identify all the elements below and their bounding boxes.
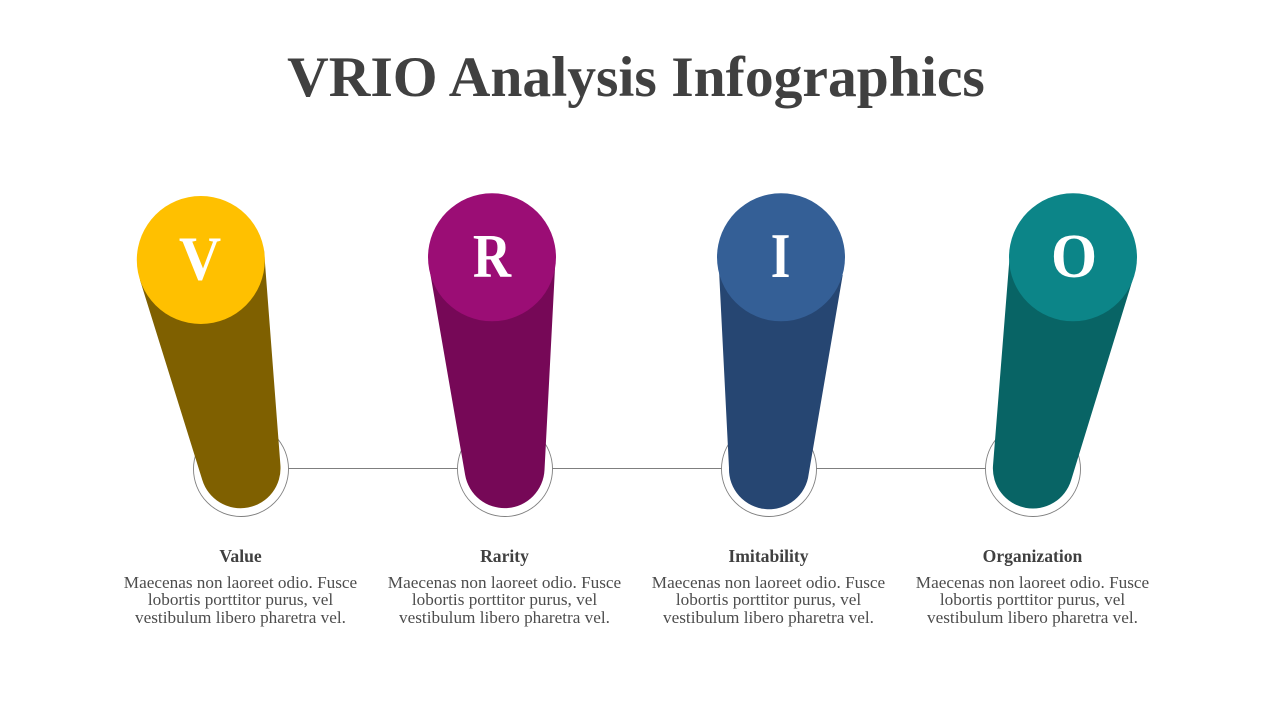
text block: Imitability: Imitability: [728, 546, 809, 566]
text block: Imitability: lobortis porttitor purus, vel: [676, 590, 861, 609]
pillar: R: R: [473, 221, 512, 291]
pillar: V: V: [179, 225, 221, 294]
text block: Rarity: Maecenas non laoreet odio. Fusce: [388, 573, 621, 592]
pillar: R: [428, 193, 556, 516]
text block: Imitability: [652, 546, 885, 627]
text block: Rarity: vestibulum libero pharetra vel.: [399, 608, 610, 627]
text block: Organization: lobortis porttitor purus, vel: [940, 590, 1125, 609]
text block: Value: lobortis porttitor purus, vel: [148, 590, 333, 609]
text block: Value: [124, 546, 357, 627]
text block: Imitability: vestibulum libero pharetra vel.: [663, 608, 874, 627]
pillar: I: I: [771, 222, 790, 291]
text block: Value: Value: [219, 546, 262, 566]
pillar: I: [717, 193, 845, 516]
pillar: V: [137, 196, 288, 516]
text block: Organization: Organization: [983, 546, 1082, 566]
pillar: O: O: [1051, 222, 1097, 291]
text block: Rarity: [388, 546, 621, 627]
text block: Imitability: Maecenas non laoreet odio. Fusce: [652, 573, 885, 592]
text block: Rarity: Rarity: [480, 546, 529, 566]
text block: Organization: vestibulum libero pharetra vel.: [927, 608, 1138, 627]
text block: Value: vestibulum libero pharetra vel.: [135, 608, 346, 627]
text block: Value: Maecenas non laoreet odio. Fusce: [124, 573, 357, 592]
text block: Rarity: lobortis porttitor purus, vel: [412, 590, 597, 609]
text block: Organization: Maecenas non laoreet odio. Fusce: [916, 573, 1149, 592]
title: VRIO Analysis Infographics: [287, 46, 985, 108]
text block: Organization: [916, 546, 1149, 627]
pillar: O: [986, 193, 1137, 516]
